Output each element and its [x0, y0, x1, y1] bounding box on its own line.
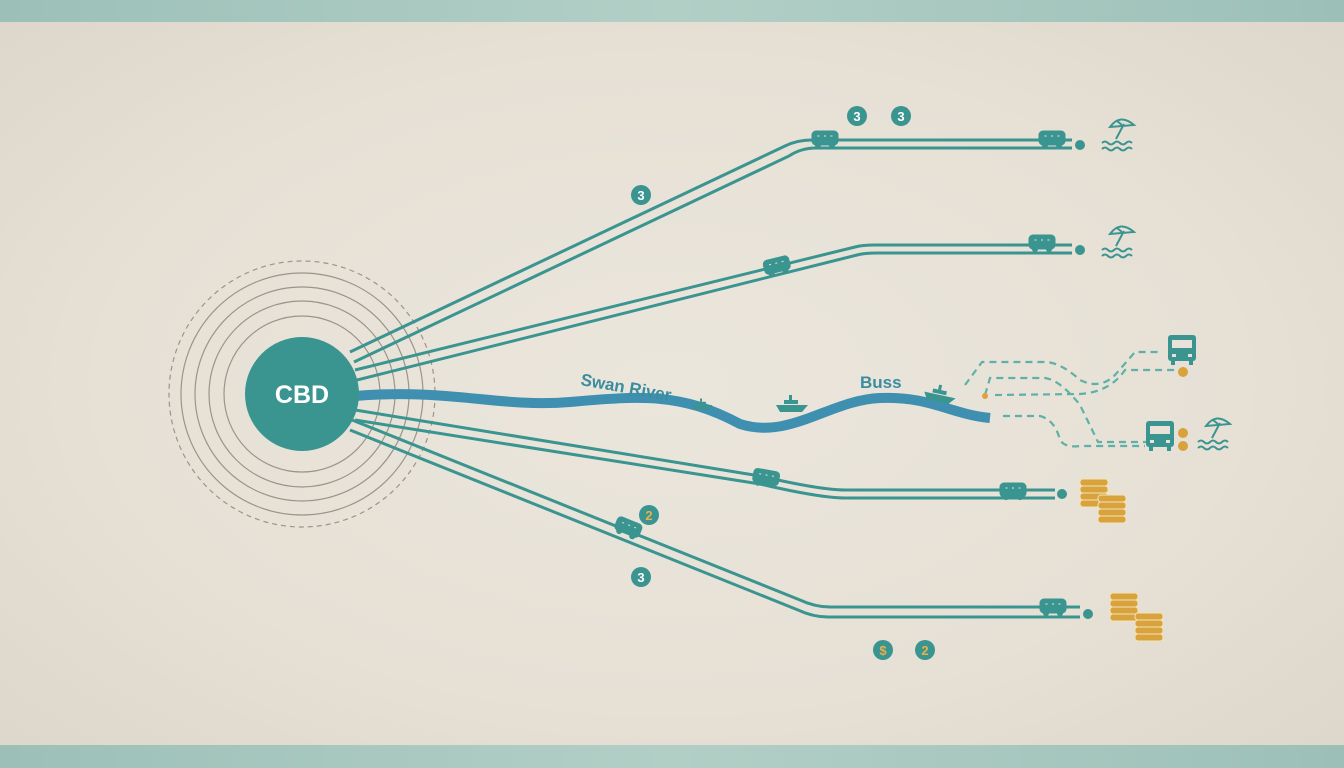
number badges: 3 [637, 188, 645, 203]
coins [1080, 479, 1108, 507]
route 5 [350, 420, 1093, 619]
number badges: 3 [637, 570, 645, 585]
top band [0, 0, 1344, 22]
route 4 [355, 410, 1067, 499]
CBD hub [245, 337, 359, 451]
beach icons [1102, 119, 1134, 150]
number badges [631, 106, 935, 660]
number badges: 2 [921, 643, 929, 658]
Swan River [355, 394, 990, 428]
CBD hub: CBD [275, 381, 329, 409]
route 1 [350, 132, 1085, 362]
bottom band [0, 745, 1344, 768]
transit map: Buss [860, 373, 902, 392]
boats [692, 398, 712, 410]
number badges: 2 [645, 508, 653, 523]
route 2 [355, 236, 1085, 380]
big buses [1168, 335, 1196, 365]
dashed connectors [965, 352, 1180, 446]
river labels: Swan River [579, 370, 673, 405]
number badges: $ [879, 643, 887, 658]
number badges: 3 [853, 109, 861, 124]
number badges: 3 [897, 109, 905, 124]
CBD rings [169, 261, 435, 527]
